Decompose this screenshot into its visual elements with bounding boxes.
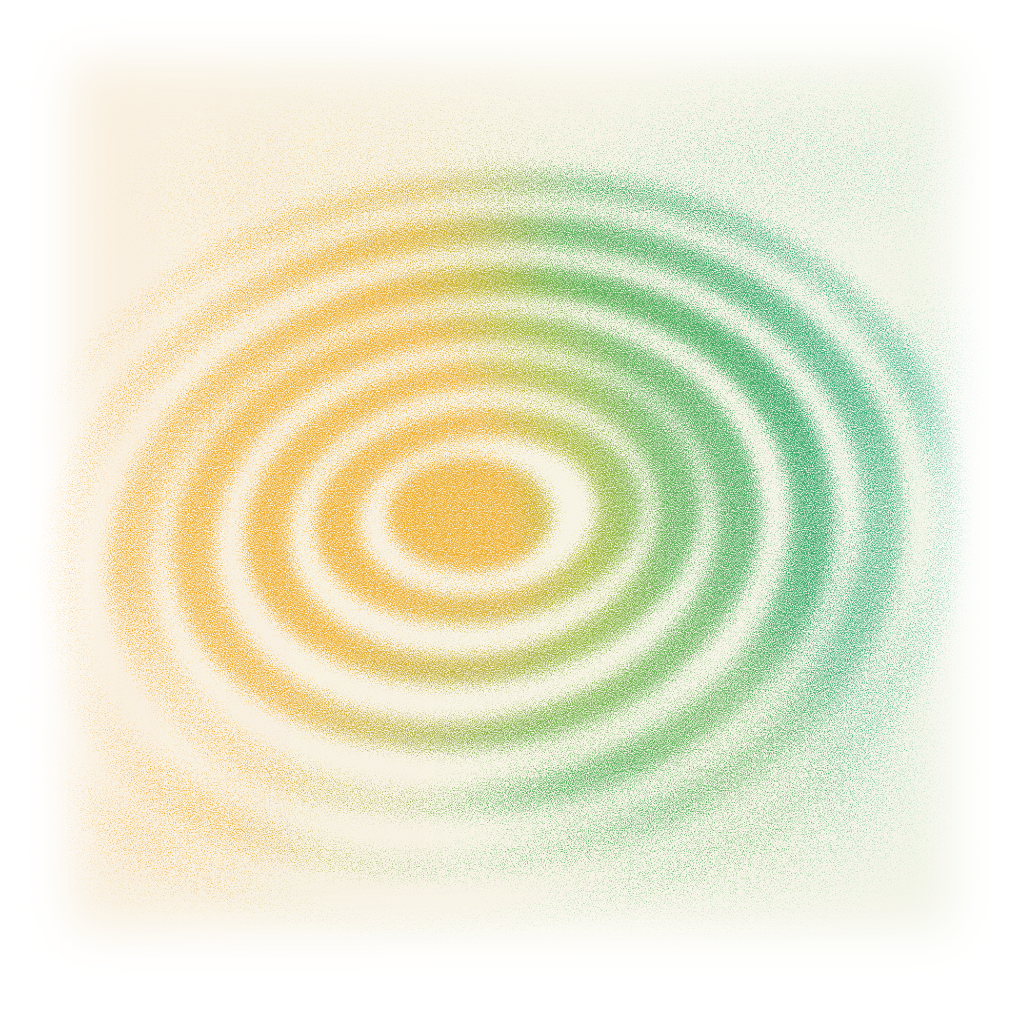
background: cream sand square xyxy=(72,62,952,930)
